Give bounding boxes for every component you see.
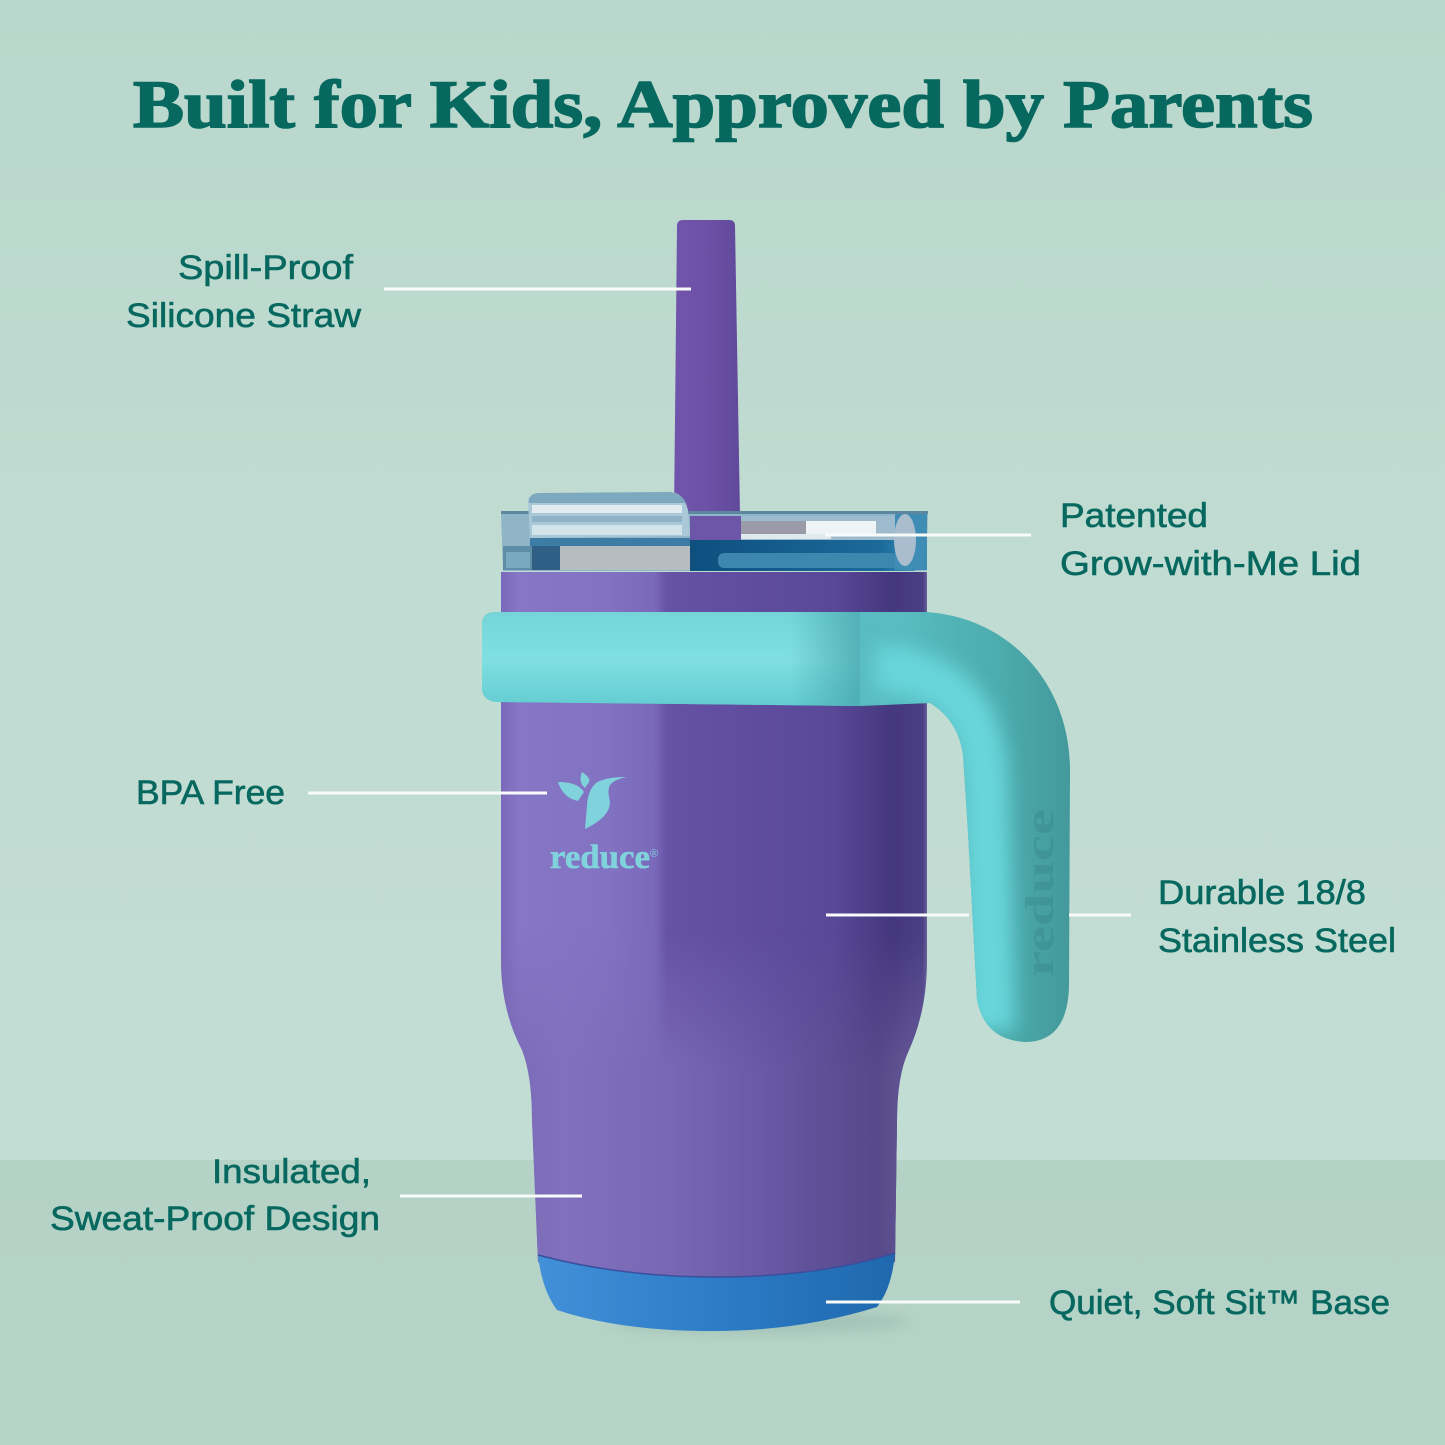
soft sit base [538,1253,895,1331]
handle light ridge [875,668,992,1030]
label: straw: Spill-Proof [178,249,354,287]
label: steel: Stainless Steel [1158,922,1396,960]
reduce logo: ® [650,848,658,860]
base seam [538,1253,895,1277]
silicone straw [674,220,740,515]
label: straw: Silicone Straw [126,297,361,335]
line: lid [825,534,1031,536]
line: straw [384,288,691,290]
clear lid [501,492,928,571]
label: base: Quiet, Soft Sit™ Base [1049,1284,1390,1322]
label: lid: Patented [1060,497,1208,535]
label: steel [1158,874,1396,960]
handle embossed wordmark: reduce [1017,809,1062,977]
label: insulated: Insulated, [212,1153,371,1191]
label: insulated: Sweat-Proof Design [50,1200,380,1238]
product: kids tumbler [482,220,1070,1334]
label: straw [126,249,361,335]
handle and band [482,612,1070,1042]
label: lid: Grow-with-Me Lid [1060,545,1361,583]
label: lid [1060,497,1361,583]
band face [482,612,860,708]
label: steel: Durable 18/8 [1158,874,1366,912]
lower body matte section [501,968,927,1276]
contact shadow [610,1310,910,1334]
title: Built for Kids, Approved by Parents [133,66,1313,142]
reduce logo [550,772,658,876]
floor surface [0,1160,1445,1445]
band shade [803,612,860,706]
logo mark [585,777,627,829]
line: insulated [400,1194,582,1198]
line: steel outer [1069,914,1131,916]
tumbler body [501,572,927,1281]
label: BPA free: BPA Free [136,774,285,812]
line: steel [826,914,969,916]
line: base [826,1300,1020,1304]
line: BPA free [308,792,547,794]
logo wordmark: reduce [550,839,650,876]
leader lines [308,289,1131,1302]
label: insulated [50,1153,380,1238]
lid flip cap [528,492,690,538]
